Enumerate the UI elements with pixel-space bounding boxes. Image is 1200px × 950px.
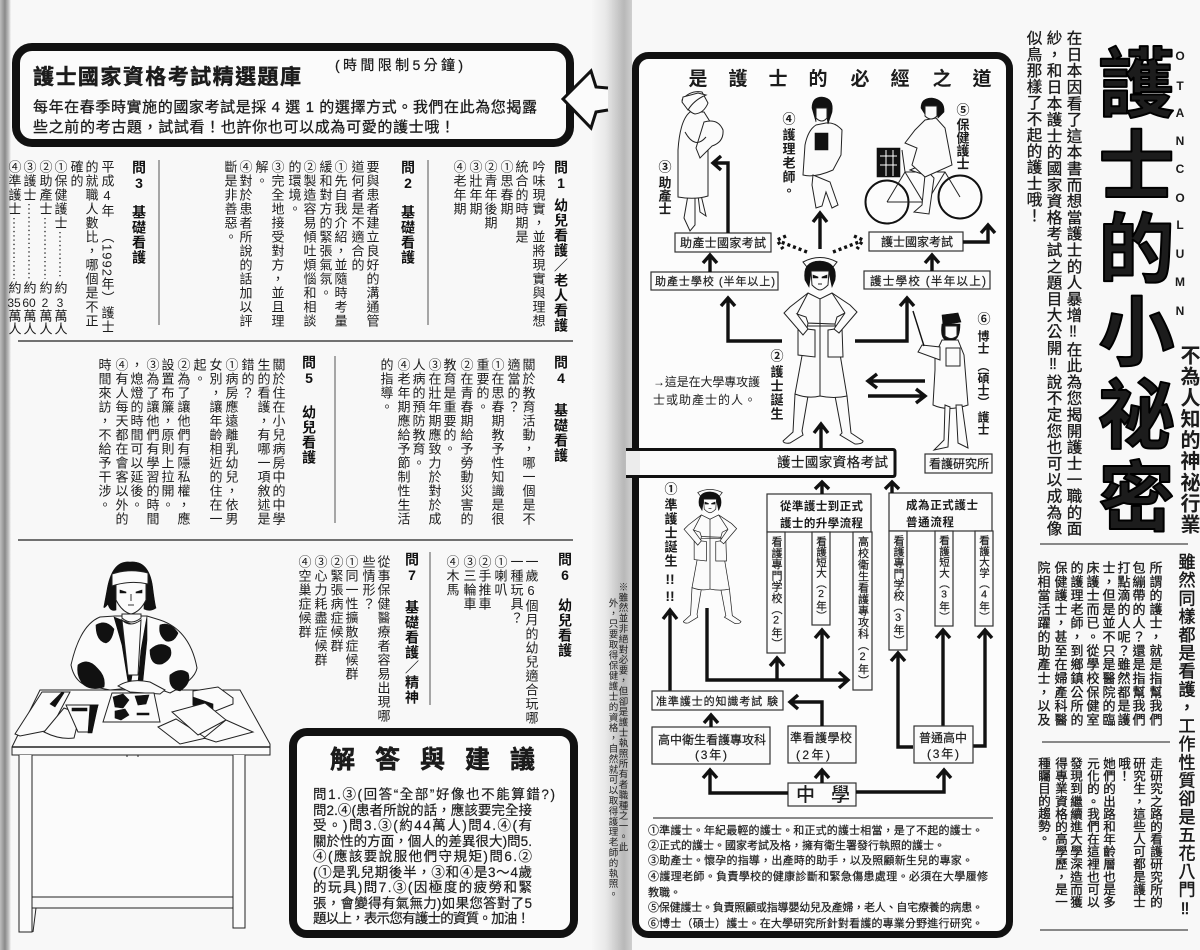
arrow: general high school to junior college: [936, 630, 950, 726]
question 4: ③在壯年期應致力於對於成: [426, 358, 442, 526]
subtitle: 不為人知的神祕行業: [1177, 345, 1200, 534]
question 6: 一種玩具？: [508, 555, 524, 625]
question 3: 平成4年: [100, 160, 114, 218]
heading: path title: 護: [728, 68, 748, 90]
question 6: ①喇叭: [492, 555, 508, 597]
question 5: 幼兒看護: [301, 404, 317, 465]
flow box: assistant knowledge exam: 准準護士的知識考試 験: [656, 694, 778, 708]
answer text: 題以上，表示您有護士的資質。加油！: [313, 910, 530, 926]
answer text: 問1.③(回答“全部”好像也不能算錯?): [313, 786, 555, 802]
panel: exam question bank header: [16, 47, 570, 143]
text block: research nurses: 哦！: [1116, 757, 1130, 782]
answer text: (①是乳兒期後半，③和④是3～4歲: [313, 865, 532, 880]
question 3: 萬人: [52, 309, 68, 335]
question 3: 約: [38, 281, 52, 295]
question 3: 35: [7, 296, 21, 310]
flow box: assistant nursing school: [788, 726, 856, 763]
arrow: exam to nurse: [814, 424, 828, 448]
bar: national qualification exam: [626, 450, 895, 476]
question 1: ①思春期: [498, 160, 514, 216]
illustration: student at desk: [12, 562, 270, 932]
legend: nurse types: ④護理老師。負責學校的健康診斷和緊急傷患處理。必須在大學履修: [648, 869, 988, 883]
question 2: 問2: [400, 160, 416, 192]
question 3: 護士: [100, 305, 114, 334]
question 2: 要與患者建立良好的溝通管: [364, 160, 380, 328]
sidebar: otan column: O: [1175, 49, 1185, 63]
figure: assistant nurse: [683, 489, 741, 624]
arrow: general high school to vocational: [891, 653, 913, 747]
figure: midwife: [678, 92, 723, 231]
question 3: 約: [6, 281, 22, 295]
column: nursing vocational school 3y: [889, 531, 907, 650]
arrow: nurse to nursing school: [855, 298, 914, 341]
left page edge: [0, 0, 11, 950]
label: assistant nurse: 準護士誕生: [662, 497, 678, 568]
arrow: dotted to nurse exam: [833, 236, 863, 252]
question 5: 關於住在小兒病房中的中學: [270, 358, 286, 526]
arrow: midwife exam to midwife: [713, 156, 728, 233]
arrow: major to exam: [704, 715, 718, 727]
text block: research nurses: 發現到繼續進大學深造而獲: [1068, 756, 1082, 908]
arrow: upgrade track to exam: [815, 482, 829, 494]
sidebar: otan column: C: [1176, 162, 1185, 176]
column: university 4y: 看護大学（4年）: [978, 534, 990, 622]
flow box: nurse exam: 護士國家考試: [881, 234, 953, 249]
book spine shadow: [592, 0, 632, 950]
sidebar: otan column: N: [1176, 304, 1184, 318]
arrow: assistant nurse to upgrade: [707, 608, 848, 688]
question 2: 基礎看護: [400, 204, 416, 265]
bar: national qualification exam: 護士國家資格考試: [777, 454, 888, 470]
label: public health nurse: ⑤: [954, 103, 970, 116]
column: junior college 2y: [812, 532, 830, 625]
question 5: ②為了讓他們有隱私權，應: [176, 358, 190, 526]
heading: path title: 經: [890, 68, 910, 90]
desk: [12, 690, 270, 932]
heading: path title: 是: [688, 69, 708, 90]
question 5: 女別，讓年齡相近的住在一: [208, 357, 222, 526]
question 3: [6, 159, 147, 335]
text block: research nurses: 種矚目的趨勢。: [1036, 757, 1050, 844]
figure: registered nurse: [783, 258, 863, 444]
text block: what nurses are: 打點滴的人呢？雖然都是護: [1116, 561, 1130, 726]
flow box: nursing school: 護士學校 (半年以上): [870, 274, 986, 288]
arrow: to doctoral: [868, 374, 925, 388]
question 2: ②製造容易傾吐煩惱和相談: [302, 160, 316, 328]
flow box: graduate school: 看護研究所: [929, 456, 989, 471]
flow box: regular track: [889, 493, 992, 531]
question 6: ②手推車: [476, 555, 492, 611]
question 1: 幼兒看護／老人看護: [553, 197, 569, 333]
column: nursing vocational school 2y: [767, 532, 785, 653]
flow box: midwife school: [651, 272, 778, 290]
answer text: 關於性的方面，個人的差異很大)問5.: [313, 834, 532, 849]
column: junior college 2y: 看護短大（2年）: [815, 535, 827, 621]
flow box: general high school: (3年): [927, 747, 959, 761]
legend: nurse types: 教職。: [648, 885, 681, 899]
question 5: ③為了讓他們有學習的時間: [144, 358, 160, 526]
column: nursing vocational school 3y: 看護專門学校（3年）: [892, 534, 904, 646]
question 4: 問4: [553, 355, 569, 387]
arrow: nursing school to exam: [925, 255, 939, 271]
question 5: 生的看護，有哪一項敘述是: [256, 358, 270, 526]
column: nursing vocational school 2y: 看護專門学校（2年）: [770, 535, 782, 649]
column: high school major 2y: 高校衛生看護專攻科（2年）: [856, 535, 869, 686]
question 4: [378, 355, 569, 526]
question 5: 問5: [301, 355, 317, 387]
sidebar: otan column: U: [1176, 247, 1184, 261]
flow box: regular track: 普通流程: [906, 515, 954, 529]
question 6: 幼兒看護: [557, 597, 573, 658]
label: registered nurse: 護士誕生: [768, 364, 784, 421]
question 6: 一歲6個月的幼兒適合玩哪: [524, 555, 538, 725]
question 5: ，熄燈的時間可以延後。: [128, 358, 144, 512]
question 2: [222, 159, 416, 328]
question 1: 吟味現實，並將現實與理想: [530, 159, 546, 328]
question 5: 設置布簾，原則上拉開。: [160, 357, 174, 512]
footnote along spine: 外，只要取得保健護士的資格，自然就可以取得護理老師的執照。: [606, 597, 618, 900]
answer text: 的玩具)問7.③(因極度的疲勞和緊: [313, 879, 532, 895]
intro paragraph: 紗，和日本護士的國家資格考試之題目大公開‼說不定您也可以成為像: [1044, 30, 1062, 537]
question 4: ①在思春期教予性知識是很: [490, 358, 504, 526]
question 3: 2: [42, 296, 49, 310]
heading: path title: 道: [972, 68, 992, 90]
question 3: 確的: [68, 159, 84, 188]
footnote along spine: [606, 582, 628, 900]
flow box: junior high: 中: [796, 784, 815, 806]
flow box: health nursing major: [652, 727, 770, 764]
flow box: general high school: 普通高中: [919, 730, 967, 745]
column: university 4y: [975, 531, 993, 626]
label: assistant nurse: [662, 482, 678, 604]
question 6: ④木馬: [444, 555, 460, 597]
intro text: 些之前的考古題，試試看！也許你也可以成為可愛的護士哦！: [33, 119, 455, 136]
legend: nurse types: ⑥博士（碩士）護士。在大學研究所針對看護的專業分野進行研究。: [648, 916, 983, 930]
question 4: 關於教育活動，哪一個是不: [520, 358, 536, 526]
sidebar: otan column: L: [1176, 218, 1184, 232]
sidebar: otan column: M: [1175, 275, 1185, 289]
question 3: ①保健護士: [52, 160, 68, 230]
subheading: different kinds of work: 雖然同樣都是看護，工作性質卻是五花八門‼: [1176, 553, 1195, 918]
legend: nurse types: [648, 823, 988, 930]
arrow: junior high to assistant school: [815, 770, 829, 783]
question 2: ①先自我介紹，並隨時考量: [332, 160, 348, 328]
label: public health nurse: 保健護士: [954, 118, 970, 170]
question 3: ②助產士: [38, 160, 52, 216]
text block: what nurses are: 保健護士，甚至在婦產科醫: [1052, 561, 1068, 727]
question 3: 的就職人數比，哪個是不正: [84, 159, 98, 328]
text block: what nurses are: [1036, 560, 1162, 727]
question 2: ③完全地接受對方，並且理: [270, 160, 284, 328]
question 7: 基礎看護／精神: [404, 599, 420, 705]
label: school nurse teacher: ④: [780, 112, 796, 125]
question 2: 斷是非善惡。: [222, 160, 238, 244]
sidebar: otan column: A: [1176, 106, 1185, 120]
heading: path title: [688, 67, 992, 90]
text block: research nurses: [1036, 756, 1162, 908]
flow box: junior high: [788, 783, 856, 806]
question 1: ④老年期: [452, 160, 466, 216]
question 2: 緩和對方的緊張氣氛。: [318, 160, 332, 300]
text block: what nurses are: 士，但是並不只是醫院的臨: [1100, 561, 1116, 726]
text block: what nurses are: 床護士而已。從學校保健室: [1084, 561, 1100, 726]
question 4: ④老年期應給予節制性生活: [396, 358, 410, 526]
question 1: 統合的時期是: [514, 160, 528, 244]
sidebar: otan column: O: [1175, 191, 1185, 205]
arrow: star pointer: [563, 71, 608, 128]
question 3: （: [100, 230, 114, 244]
column: junior college 3y: [935, 531, 953, 626]
question 7: 些情形？: [360, 555, 376, 611]
arrow: assistant school to exam: [790, 695, 822, 726]
label: doctoral nurse: [976, 312, 990, 435]
intro text: [33, 98, 537, 136]
panel: nursing career path: [626, 56, 1010, 934]
text block: what nurses are: 所謂的護士，就是指幫我們: [1148, 561, 1162, 726]
label: doctoral nurse: 護士: [976, 410, 990, 435]
books right: [158, 687, 253, 744]
question 7: [296, 552, 420, 723]
label: doctoral nurse: ⑥: [976, 312, 990, 325]
label: assistant nurse: !!: [665, 571, 675, 587]
question 7: 問7: [404, 552, 420, 584]
answer text: [313, 786, 555, 926]
note: university graduates: [653, 374, 760, 407]
arrow: regular track to exam: [885, 482, 899, 493]
arrow: knowledge exam to assistant nurse: [663, 610, 677, 692]
intro paragraph: 似鳥那樣了不起的護士哦！: [1024, 30, 1042, 223]
footnote along spine: ※雖然並非絕對必要，但卻是護士執照所有者職種之一。此: [616, 582, 628, 852]
books left: [15, 692, 98, 738]
question 5: ④有人每天都在會客以外的: [114, 358, 128, 526]
label: school nurse teacher: 護理老師。: [780, 127, 796, 198]
flow box: upgrade track: 護士的升學流程: [780, 516, 864, 530]
flow box: midwife exam: [675, 233, 771, 252]
answer text: 受。)問3.③(約44萬人)問4.④(有: [313, 818, 532, 833]
flow box: assistant knowledge exam: [652, 691, 783, 710]
legend: nurse types: ①準護士。年紀最輕的護士。和正式的護士相當，是了不起的護士。: [648, 823, 983, 837]
question 3: 問3: [131, 160, 147, 192]
question 7: 從事保健醫療者容易出現哪: [376, 555, 390, 723]
legend: nurse types: ②正式的護士。國家考試及格，擁有衛生署發行執照的護士。: [648, 838, 945, 852]
question 1: 問1: [553, 160, 569, 192]
arrow: to teacher: [813, 213, 827, 249]
arrow: junior high to major: [703, 770, 788, 793]
question 6: [444, 552, 573, 725]
question 1: ②青年後期: [482, 160, 498, 230]
arrow: nurse to midwife school: [721, 298, 782, 341]
figure: public health nurse on bicycle: [866, 98, 982, 224]
flow box: health nursing major: (3年): [695, 748, 727, 762]
text block: research nurses: 走研究之路的看護研究所的: [1148, 757, 1162, 908]
intro paragraph: 在日本因看了這本書而想當護士的人暴增‼在此為您揭開護士一職的面: [1064, 30, 1082, 536]
question 7: ①同一性擴散症候群: [344, 555, 358, 681]
question 5: 錯的？: [240, 358, 254, 400]
answer text: 張，會變得有氣無力)如果您答對了5: [313, 895, 532, 911]
question 3: 萬人: [38, 309, 52, 335]
question 7: ④空巢症候群: [296, 555, 312, 639]
question 2: 道何者是不適合的: [350, 160, 364, 272]
note: university graduates: 士或助產士的人。: [653, 392, 756, 407]
flow box: upgrade track: 從準護士到正式: [780, 499, 864, 513]
time limit note: (時間限制5分鐘): [335, 57, 463, 73]
text block: research nurses: 元化的。我們在這裡也可以: [1085, 757, 1099, 908]
question 1: ③壯年期: [468, 160, 482, 216]
question 6: 問6: [557, 552, 573, 584]
label: midwife: 助產士: [656, 175, 672, 215]
flow box: graduate school: [925, 454, 992, 473]
label: assistant nurse: ①: [662, 482, 678, 495]
flow box: assistant nursing school: (2年): [796, 748, 830, 762]
label: registered nurse: ②: [768, 349, 784, 362]
question 7: ②緊張病症候群: [328, 555, 344, 653]
flow box: regular track: 成為正式護士: [906, 498, 978, 512]
question 4: 人病的預防教育。: [410, 358, 426, 470]
legend: nurse types: ③助產士。懷孕的指導，出產時的助手，以及照顧新生兒的專家。: [648, 853, 973, 867]
arrow: nurse exam to public health nurse: [963, 225, 995, 242]
question 4: 的指導。: [378, 357, 394, 414]
heading: path title: 士: [768, 68, 788, 90]
question 5: 起。: [192, 358, 206, 386]
question 3: 3: [57, 296, 64, 310]
question 5: 時間來訪，不給予干涉。: [96, 358, 112, 512]
flow box: health nursing major: 高中衛生看護專攻科: [658, 732, 766, 747]
heading: path title: 必: [850, 68, 870, 90]
question 3: ④準護士: [6, 160, 22, 216]
flow box: general high school: [914, 726, 973, 763]
question 3: 1992: [100, 244, 114, 277]
sidebar: otan column: [1175, 49, 1185, 318]
column: junior college 3y: 看護短大（3年）: [938, 534, 950, 622]
text block: research nurses: 得專業資格的高學歷，是一: [1053, 756, 1067, 908]
intro text: 每年在春季時實施的國家考試是採 4 選 1 的選擇方式。我們在此為您揭露: [33, 98, 537, 116]
question 4: 適當的？: [506, 357, 520, 414]
question 3: ③護士: [22, 160, 36, 202]
flow box: midwife exam: 助產士國家考試: [680, 235, 766, 250]
text block: what nurses are: 包繃帶的人？還是指幫我們: [1130, 561, 1146, 726]
note: university graduates: →這是在大學專攻護: [653, 374, 760, 389]
question 5: [96, 355, 317, 526]
arrow: dotted to midwife exam: [777, 236, 807, 252]
flow box: nursing school: [864, 271, 990, 289]
heading: answers and advice: 解答與建議: [330, 746, 535, 774]
legend: nurse types: ⑤保健護士。負責照顧或指導嬰幼兒及產婦，老人、自宅療養的病患。: [648, 900, 983, 914]
question 2: ④對於患者所說的話加以評: [238, 160, 252, 328]
figure: doctoral nurse with pointer: [913, 311, 968, 450]
flow box: midwife school: 助產士學校 (半年以上): [655, 274, 775, 288]
question 4: 重要的。: [474, 357, 490, 414]
question 3: 年）: [100, 277, 114, 305]
person: [71, 562, 197, 694]
flow box: assistant nursing school: 準看護學校: [790, 730, 852, 745]
question 4: 教育是重要的。: [442, 357, 456, 456]
label: assistant nurse: !!: [665, 588, 675, 604]
question 4: 基礎看護: [553, 402, 569, 463]
question 3: 約: [52, 281, 68, 295]
text block: what nurses are: 的護理老師，到鄉鎮公所的: [1068, 560, 1084, 726]
question 3: 約: [22, 281, 36, 295]
label: doctoral nurse: （碩士）: [976, 360, 990, 408]
question 3: 萬人: [22, 309, 36, 335]
answer text: 問2.④(患者所說的話，應該要完全接: [313, 802, 532, 818]
question 1: [452, 159, 569, 333]
text block: what nurses are: 院相當活躍的助產士，以及: [1036, 561, 1050, 727]
question 3: 60: [22, 296, 36, 310]
question 6: ③三輪車: [462, 555, 476, 611]
heading: question bank title: 護士國家資格考試精選題庫: [33, 65, 301, 89]
label: midwife: ③: [656, 160, 672, 173]
arrow: from doctoral: [868, 389, 925, 403]
question 5: ①病房應遠離乳幼兒，依男: [224, 358, 238, 526]
sidebar: otan column: T: [1176, 79, 1184, 93]
text block: research nurses: 研究生，這些人可都是護士: [1131, 757, 1145, 908]
main title: 護士的小祕密: [1086, 44, 1174, 534]
intro paragraph: [1024, 30, 1082, 537]
question 4: ②在青春期給予勞動災害的: [458, 358, 474, 526]
question 3: 萬人: [6, 309, 22, 335]
exam paper: [103, 693, 160, 722]
heading: path title: 的: [808, 68, 828, 90]
answer text: ④(應該要說服他們守規矩)問6.②: [313, 848, 532, 864]
flow box: junior high: 學: [831, 784, 850, 806]
question 7: ③心力耗盡症候群: [312, 555, 328, 667]
flow box: nurse exam: [869, 232, 963, 251]
arrow: junior high to general high school: [856, 770, 951, 792]
figure: school nurse teacher: [803, 97, 842, 208]
flow box: upgrade track: [767, 494, 871, 532]
arrow: midwife school to exam: [703, 255, 717, 272]
panel: answers and advice: [293, 732, 574, 934]
text block: research nurses: 她們的出路和年齡層也是多: [1101, 757, 1115, 908]
column: high school major 2y: [853, 532, 872, 690]
question 2: 解。: [254, 160, 268, 188]
heading: path title: 之: [932, 67, 952, 90]
label: doctoral nurse: 博士: [976, 329, 990, 354]
arrow: general high school to university: [973, 630, 992, 746]
question 3: 基礎看護: [131, 204, 147, 265]
question 2: 的環境。: [286, 159, 302, 216]
sidebar: otan column: N: [1176, 134, 1184, 148]
